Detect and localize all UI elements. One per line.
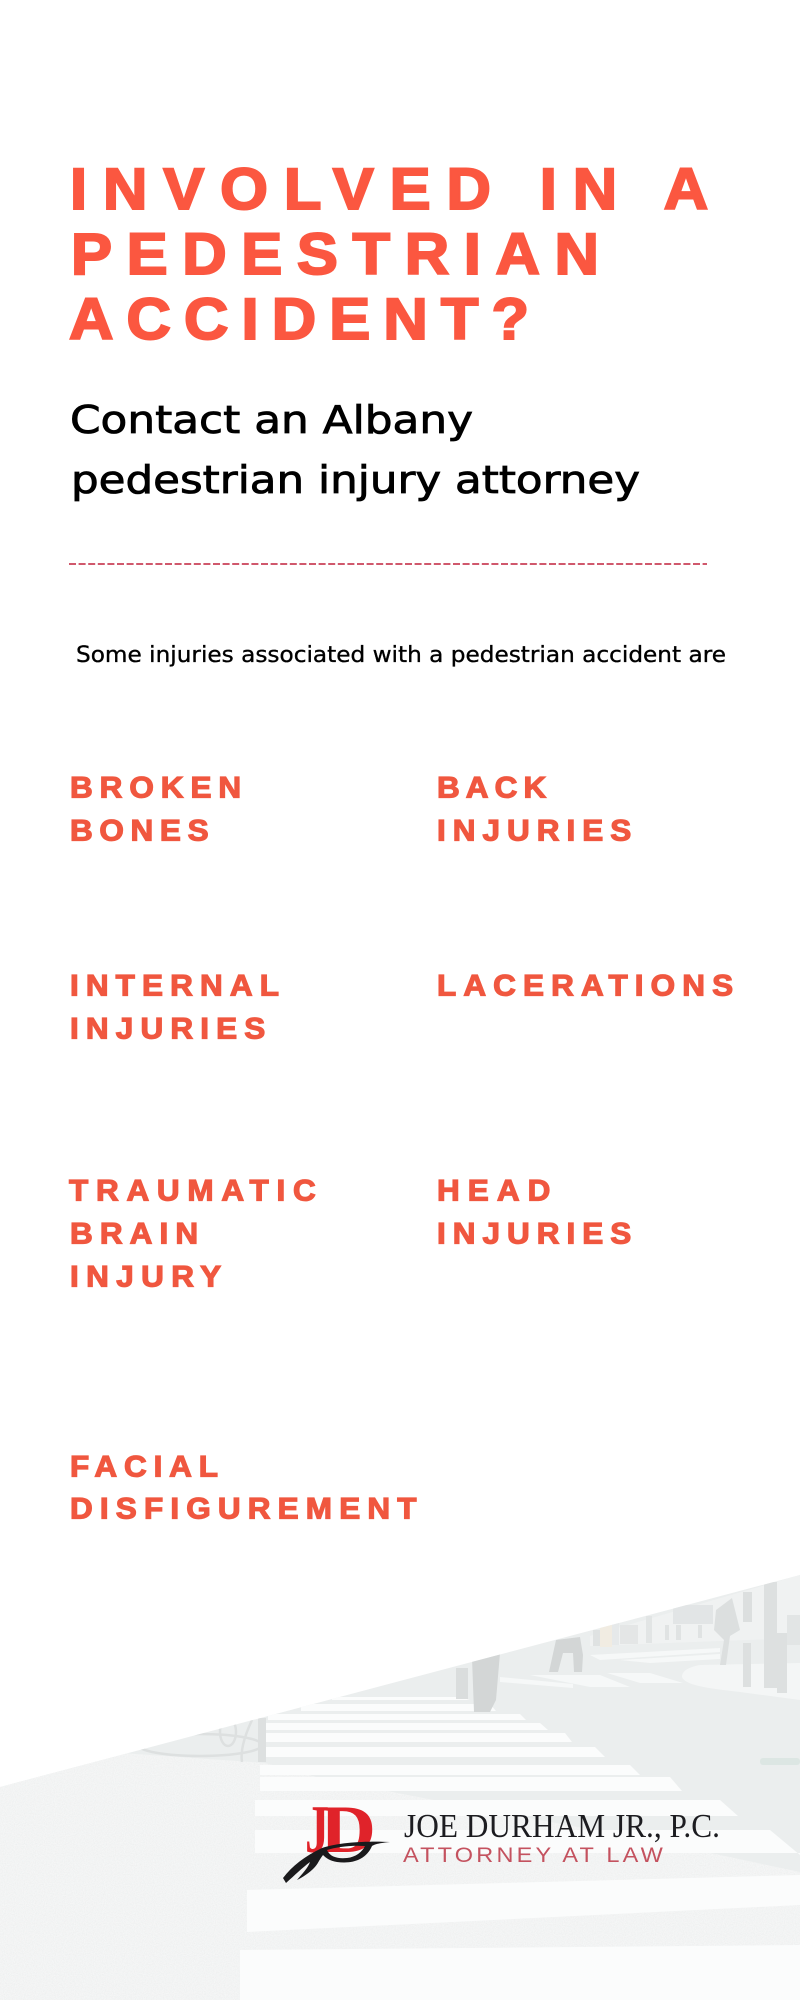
pedestrians	[456, 1592, 752, 1712]
injury: internal injuries: INJURIES	[70, 1011, 265, 1045]
subtitle: Contact an Albany	[70, 398, 473, 442]
bicycle wheel shadow	[138, 1718, 262, 1762]
title	[69, 157, 708, 352]
icon: JD monogram	[283, 1791, 390, 1883]
injury: broken bones: BONES	[70, 813, 209, 847]
far crosswalk stripes	[500, 1648, 720, 1688]
road surface	[128, 1576, 800, 1872]
crosswalk stripes	[240, 1697, 800, 2000]
tagline: ATTORNEY AT LAW	[403, 1843, 663, 1867]
injury: facial disfigurement: FACIAL	[70, 1449, 218, 1483]
pavement texture area	[0, 1750, 800, 2000]
icon: JD monogram: J	[305, 1791, 329, 1867]
injury: head injuries: INJURIES	[437, 1216, 631, 1250]
injury: internal injuries	[70, 968, 279, 1045]
green smudge	[760, 1758, 800, 1765]
injury: lacerations: LACERATIONS	[437, 968, 733, 1002]
injury: internal injuries: INTERNAL	[70, 968, 279, 1002]
title: PEDESTRIAN	[71, 222, 599, 287]
injury: broken bones	[70, 770, 241, 847]
injury: facial disfigurement	[70, 1449, 417, 1525]
firm name: JOE DURHAM JR., P.C.	[404, 1808, 720, 1845]
injury: back injuries	[437, 770, 631, 847]
buildings in the distance	[593, 1605, 800, 1647]
title: ACCIDENT?	[69, 287, 529, 352]
injury: traumatic brain injury	[69, 1173, 316, 1293]
subtitle: pedestrian injury attorney	[71, 458, 640, 502]
logo: Joe Durham Jr., P.C.	[283, 1791, 720, 1883]
injury: traumatic brain injury: INJURY	[70, 1259, 222, 1293]
injury: back injuries: INJURIES	[437, 813, 631, 847]
injury: back injuries: BACK	[437, 770, 546, 804]
injury: head injuries: HEAD	[437, 1173, 550, 1207]
sidewalk curve	[682, 1663, 800, 1700]
injury: broken bones: BROKEN	[70, 770, 241, 804]
title: INVOLVED IN A	[70, 157, 708, 222]
photo background: crosswalk street scene	[0, 1570, 800, 2000]
injury: traumatic brain injury: BRAIN	[70, 1216, 198, 1250]
subtitle	[70, 398, 640, 502]
icon: JD monogram: D	[320, 1791, 376, 1867]
injury: traumatic brain injury: TRAUMATIC	[69, 1173, 316, 1207]
injury: head injuries	[437, 1173, 631, 1250]
poles	[743, 1582, 787, 1693]
intro text: Some injuries associated with a pedestrian accident are	[76, 643, 726, 668]
dashed divider	[69, 563, 707, 565]
injury: facial disfigurement: DISFIGUREMENT	[70, 1491, 417, 1525]
